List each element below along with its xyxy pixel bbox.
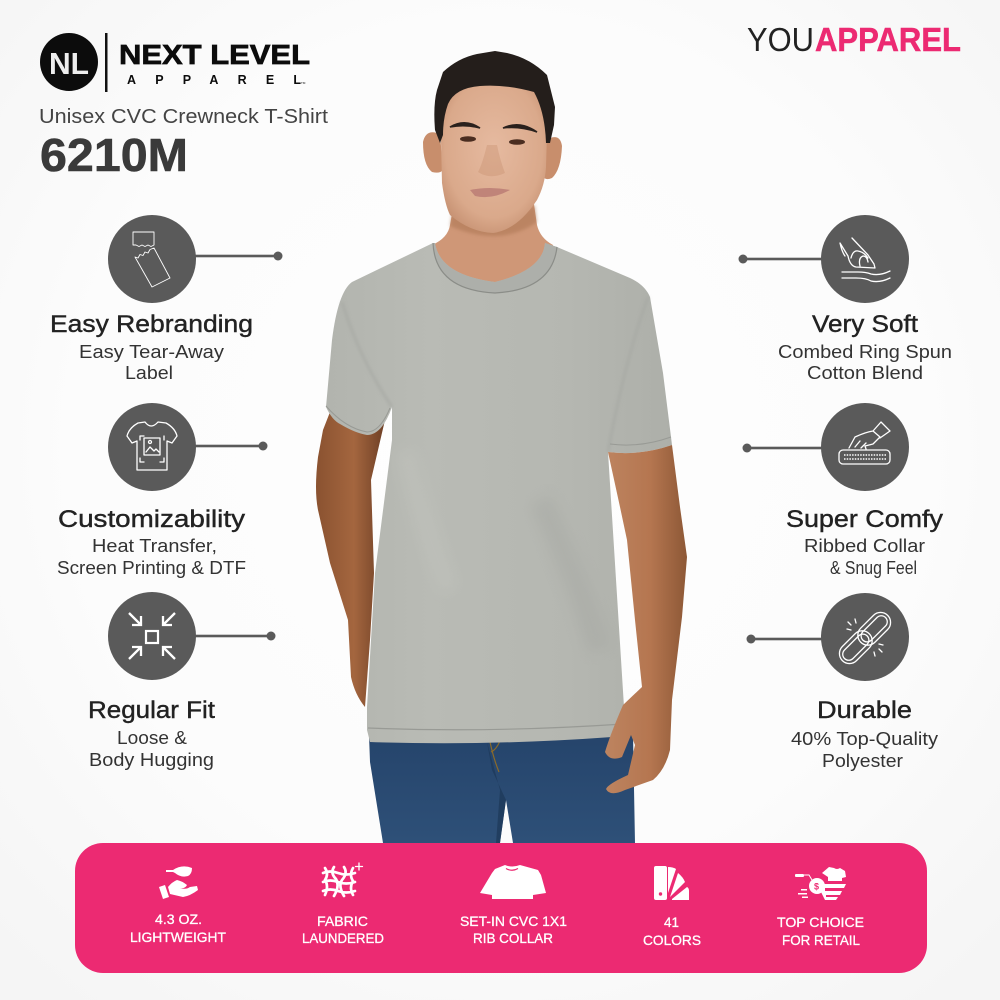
icon: retail tee, coin and stack: $	[814, 882, 819, 892]
label: FABRIC	[317, 913, 368, 929]
description: Heat Transfer,	[92, 536, 217, 556]
icon: inward arrows	[108, 592, 196, 680]
heading: Very Soft	[812, 311, 918, 338]
description: Label	[125, 363, 173, 383]
connector line	[190, 442, 268, 450]
face	[440, 78, 548, 233]
description	[791, 729, 938, 771]
brand logo: YouApparel: YOU	[747, 21, 814, 58]
spec: colors	[643, 866, 701, 948]
label: LIGHTWEIGHT	[130, 929, 226, 945]
feature: durable	[746, 593, 938, 771]
description	[804, 536, 925, 578]
brand logo: Next Level Apparel	[40, 33, 310, 92]
heading: Durable	[817, 697, 912, 724]
label: RIB COLLAR	[473, 930, 553, 946]
brand logo: Next Level Apparel: NL	[49, 46, 89, 81]
brand logo: YouApparel	[747, 21, 961, 58]
description	[79, 342, 224, 383]
icon: t-shirt collar	[480, 865, 546, 899]
neck	[432, 190, 553, 290]
t-shirt	[326, 243, 672, 743]
icon: chain link	[821, 593, 909, 681]
label: COLORS	[643, 932, 701, 948]
description	[57, 536, 246, 578]
description: Polyester	[822, 751, 903, 771]
label	[460, 913, 567, 946]
ears	[423, 132, 562, 179]
left arm	[316, 412, 385, 707]
label	[302, 913, 384, 946]
right arm and hand	[605, 445, 687, 793]
model photo illustration	[316, 51, 687, 843]
jeans	[369, 733, 635, 843]
spec: top choice for retail	[777, 867, 864, 948]
label: TOP CHOICE	[777, 914, 864, 930]
label: SET-IN CVC 1X1	[460, 913, 567, 929]
hair	[434, 51, 555, 143]
product subtitle: Unisex CVC Crewneck T-Shirt	[39, 106, 328, 128]
label	[777, 914, 864, 948]
brand logo: Next Level Apparel: APPAREL	[127, 73, 301, 87]
product code: 6210M	[40, 129, 188, 181]
heading: Super Comfy	[786, 506, 943, 533]
brand logo: Next Level Apparel: NEXT LEVEL	[119, 39, 310, 70]
icon: hand on ribbed collar	[821, 403, 909, 491]
feature: very soft	[738, 215, 952, 383]
feature: easy rebranding	[50, 215, 282, 383]
description: Screen Printing & DTF	[57, 558, 246, 578]
feature: customizability	[57, 403, 268, 578]
brand logo: YouApparel: APPAREL	[815, 21, 961, 58]
spec: rib collar	[460, 865, 567, 946]
connector line	[746, 634, 831, 644]
description: Ribbed Collar	[804, 536, 925, 556]
feature: super comfy	[742, 403, 943, 578]
heading: Regular Fit	[88, 697, 215, 724]
description: & Snug Feel	[830, 558, 917, 578]
description	[89, 728, 214, 770]
connector line	[742, 444, 832, 452]
label: 41	[664, 914, 679, 930]
spec: fabric laundered	[302, 863, 384, 946]
panel: bottom specs banner	[75, 843, 927, 973]
icon: woven fabric	[323, 863, 362, 896]
heading: Customizability	[58, 506, 245, 533]
feature: regular fit	[88, 592, 276, 770]
icon: colour swatch fan	[654, 866, 689, 900]
facial features	[450, 123, 537, 197]
description: Loose &	[117, 728, 187, 748]
label: 4.3 OZ.	[155, 911, 202, 927]
description: Easy Tear-Away	[79, 342, 224, 362]
icon: printed t-shirt	[108, 403, 196, 491]
label	[643, 914, 701, 948]
description: Combed Ring Spun	[778, 342, 952, 362]
label: LAUNDERED	[302, 930, 384, 946]
icon: tear-away label	[108, 215, 196, 303]
icon: hand on soft fabric	[821, 215, 909, 303]
description: Body Hugging	[89, 750, 214, 770]
label: FOR RETAIL	[782, 932, 860, 948]
label	[130, 911, 226, 945]
brand logo: Next Level Apparel: TM	[301, 81, 306, 85]
spec: lightweight	[130, 866, 226, 945]
heading: Easy Rebranding	[50, 311, 253, 338]
icon: hand holding leaf	[159, 866, 198, 899]
connector line	[738, 254, 828, 264]
connector line	[190, 632, 276, 640]
connector line	[190, 252, 282, 260]
description	[778, 342, 952, 383]
description: 40% Top-Quality	[791, 729, 938, 749]
description: Cotton Blend	[807, 363, 923, 383]
